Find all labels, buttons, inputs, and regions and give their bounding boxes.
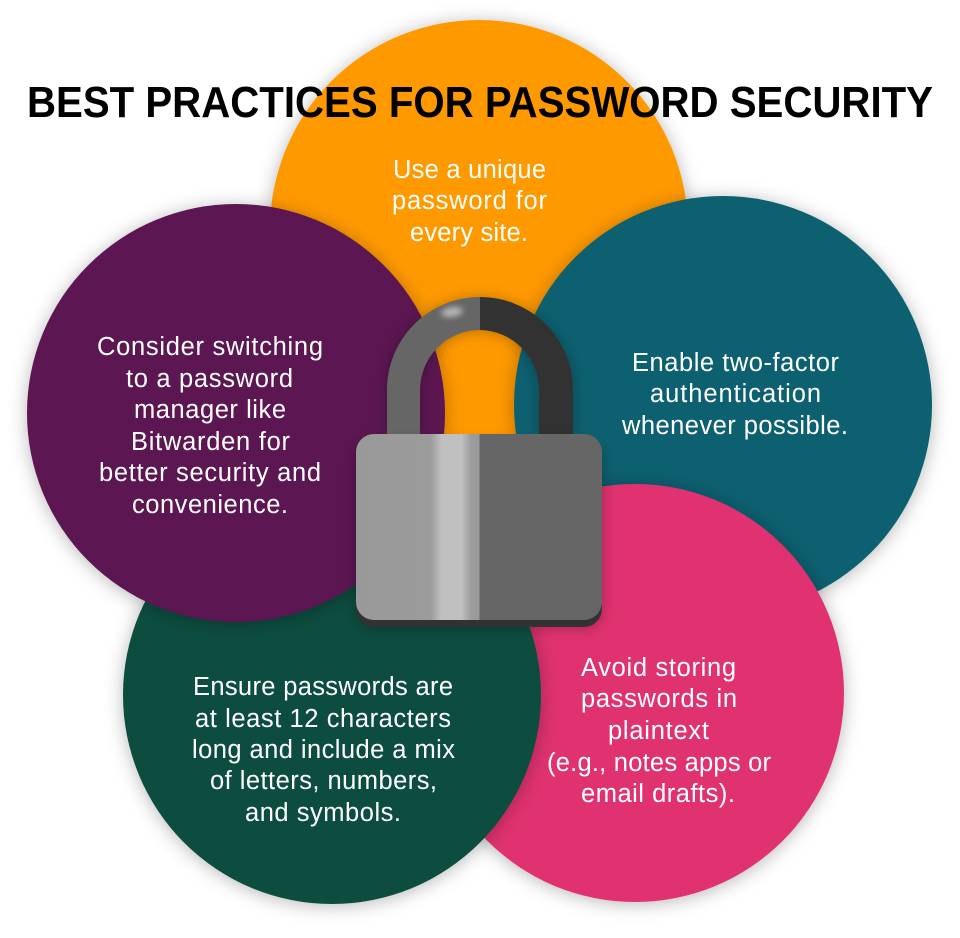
text: pink tip: email drafts). (581, 780, 735, 808)
circle: pink (426, 484, 844, 902)
text: teal tip: Enable two-factor (632, 349, 840, 377)
text: purple tip: better security and (99, 459, 321, 487)
text: pink tip (547, 654, 772, 808)
text: pink tip: (e.g., notes apps or (547, 749, 772, 777)
text: green tip: of letters, numbers, (210, 767, 437, 795)
body base (356, 441, 602, 627)
circle: green (123, 486, 541, 904)
text: orange tip (392, 156, 548, 247)
text: purple tip: Consider switching (97, 333, 323, 361)
circle: teal (514, 196, 932, 614)
text: green tip: long and include a mix (192, 736, 455, 764)
text: orange tip: Use a unique (393, 156, 546, 184)
text: purple tip: convenience. (132, 491, 288, 519)
text: orange tip: every site. (410, 219, 528, 247)
circle: orange (270, 20, 688, 438)
shackle highlight (440, 306, 464, 318)
text: green tip: and symbols. (245, 799, 401, 827)
text: pink tip: plaintext (608, 717, 709, 745)
text: purple tip: Bitwarden for (131, 428, 290, 456)
text: purple tip (97, 333, 323, 519)
text: purple tip: to a password (126, 365, 293, 393)
text: green tip: at least 12 characters (195, 705, 451, 733)
text: pink tip: Avoid storing (581, 654, 736, 682)
icon: padlock (356, 297, 602, 627)
circle: purple (27, 204, 445, 622)
text: purple tip: manager like (134, 396, 286, 424)
body right (479, 434, 602, 620)
text: teal tip: whenever possible. (621, 412, 848, 440)
text: green tip: Ensure passwords are (193, 673, 453, 701)
text: pink tip: passwords in (581, 685, 737, 713)
text: orange tip: password for (392, 187, 548, 215)
text: teal tip: authentication (650, 380, 821, 408)
text: teal tip (621, 349, 848, 440)
body left (356, 434, 480, 620)
text: green tip (192, 673, 455, 827)
shackle (387, 297, 573, 434)
